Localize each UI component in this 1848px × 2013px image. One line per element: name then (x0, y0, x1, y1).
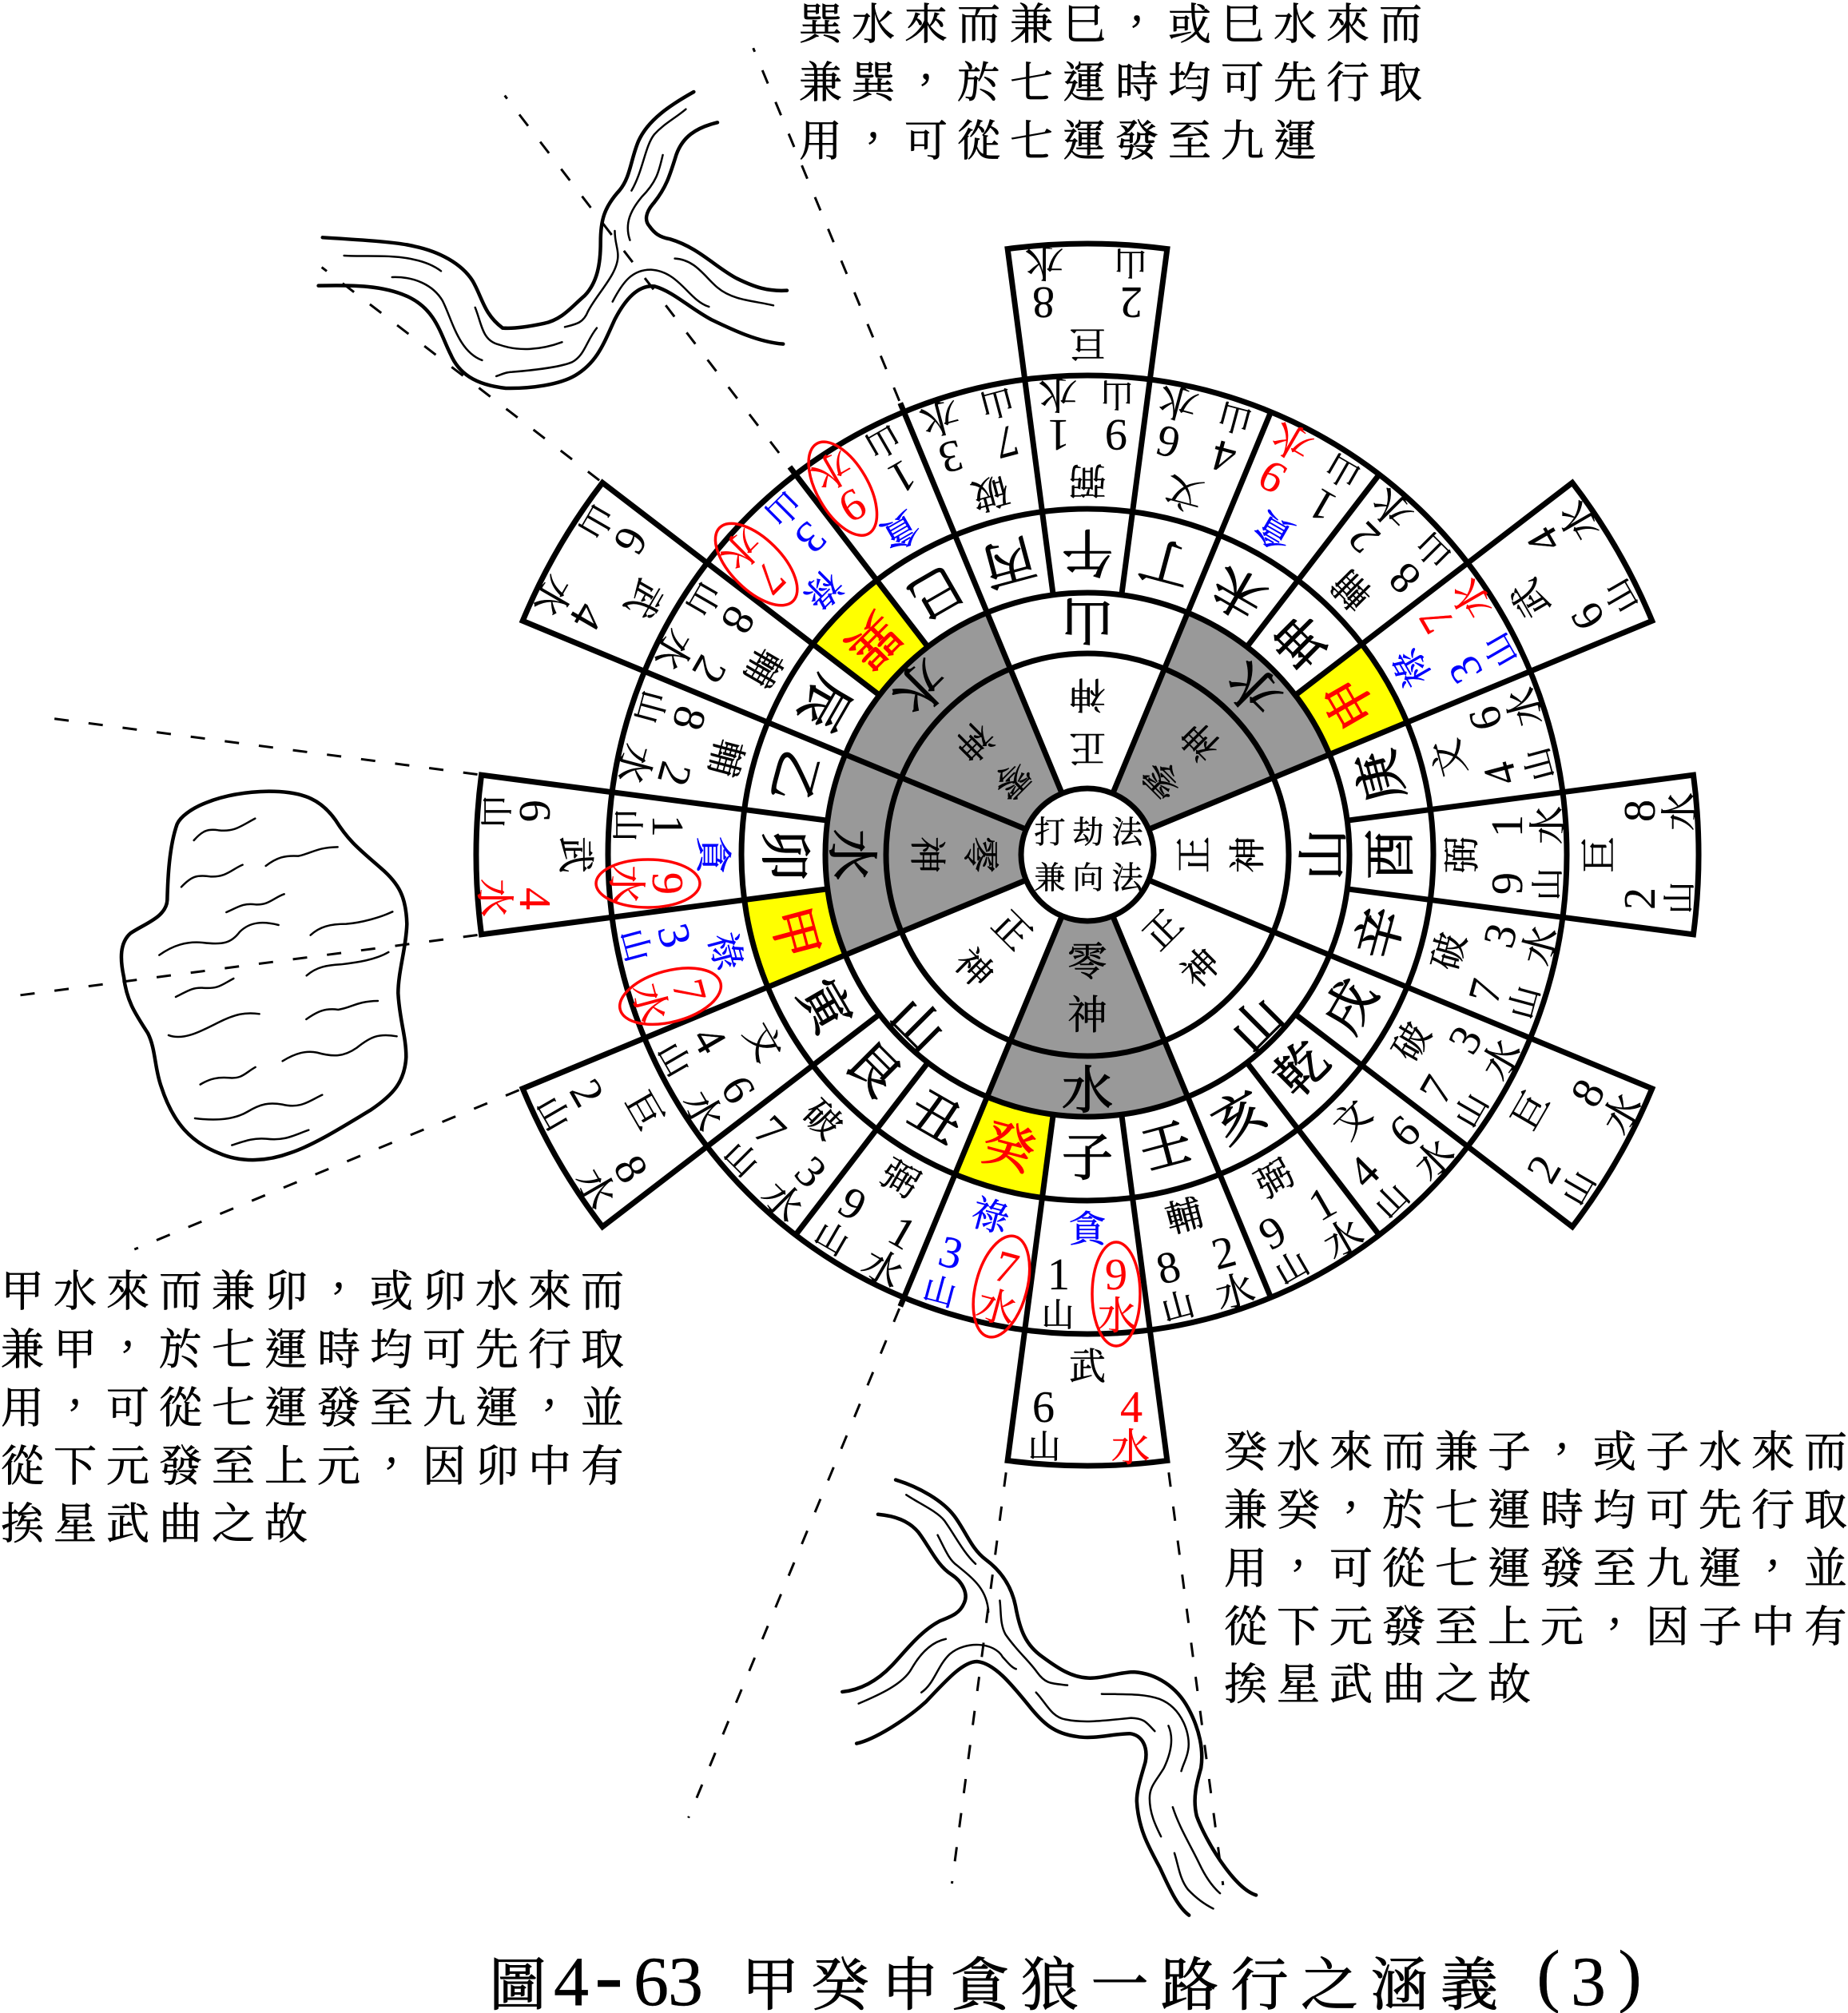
sector: 丁 (1111, 375, 1257, 601)
sector: 子 (1042, 1130, 1140, 1346)
sector: 丑: 丑 (900, 1080, 972, 1155)
sector: 巽: 山 (758, 484, 808, 533)
extended cell: 卯: 武 (554, 836, 596, 873)
sector: 乙 (608, 685, 833, 831)
sector: 戌: 戌 (1313, 971, 1388, 1042)
sector: 癸: 山 (919, 1269, 960, 1313)
sector: 乾: 4 (1339, 1147, 1389, 1197)
sector: 辛: 7 (1459, 974, 1512, 1008)
sector: 丙: 破 (968, 468, 1013, 518)
title (489, 1928, 1642, 2013)
sector: 乙: 乙 (760, 744, 829, 808)
extended cell: 申: 山 (1598, 573, 1646, 620)
sector: 未: 9 (1250, 450, 1294, 503)
extended cell: 卯: 6 (510, 800, 559, 822)
extended cell: 申: 6 (1561, 594, 1616, 638)
extended cell: 申: 武 (1504, 573, 1558, 625)
sector: 辛: 破 (1425, 929, 1474, 975)
title: ) (1618, 1937, 1642, 2013)
sector: 丁: 文 (1162, 468, 1207, 518)
inner sector: southwest 零神 水: 神 (1174, 714, 1228, 768)
sector: 未: 1 (1301, 478, 1345, 532)
sector: 甲 (601, 882, 836, 1034)
text block: right: 用，可從七運發至九運，並 (1224, 1545, 1848, 1593)
text block: top: 巽水來而兼巳，或巳水來而 (799, 1, 1432, 49)
inner sector: north 零神 水 (1062, 939, 1113, 1120)
sector: 亥: 水 (1317, 1212, 1371, 1268)
extended cell: 辰: 武 (617, 573, 670, 625)
sector: 子: 水 (1098, 1296, 1136, 1337)
sector: 壬: 2 (1206, 1226, 1241, 1280)
sector: 卯: 卯 (756, 829, 812, 880)
sector: 乙: 水 (608, 740, 659, 788)
sector: 戌: 3 (1439, 1018, 1492, 1062)
extended cell: 卯 (473, 796, 596, 917)
sector: 卯: 9 (642, 872, 692, 895)
sector: 卯: 山 (609, 808, 646, 842)
text block: left: 挨星武曲之故 (1, 1500, 317, 1548)
sector: 辰: 辰 (787, 667, 862, 739)
sector: 丙: 3 (934, 430, 968, 483)
sector: 申 (1302, 571, 1528, 757)
inner sector: northwest 正神 山: 山 (1220, 987, 1296, 1063)
text block: right: 從下元發至上元，因子中有 (1224, 1603, 1848, 1651)
sector: 寅: 6 (711, 1068, 765, 1112)
sector: 寅: 山 (650, 1036, 698, 1082)
inner sector: east 零神 水 (823, 829, 1000, 880)
extended cell: 寅: 8 (603, 1147, 658, 1191)
sector: 申: 申 (1313, 667, 1388, 739)
centre circle (1021, 788, 1154, 921)
sector: 丑 (806, 1070, 992, 1297)
sector: 午: 午 (1062, 522, 1113, 580)
extended cell: 戌 (1484, 1046, 1651, 1213)
sector: 壬: 壬 (1134, 1114, 1198, 1182)
sector: 戌 (1303, 950, 1530, 1136)
sector: 申: 水 (1445, 571, 1500, 625)
sector: 辰 (645, 574, 872, 760)
sector: 未: 水 (1266, 412, 1320, 468)
river: bottom (842, 1480, 1256, 1916)
text block: left (1, 1268, 634, 1548)
river: upper left (319, 92, 787, 388)
sector: 辛: 3 (1474, 919, 1528, 953)
sector: 坤: 輔 (1325, 562, 1380, 617)
inner sector: west 正神 山 (1174, 829, 1352, 880)
sector: 巽 (701, 474, 925, 698)
sector: 酉: 水 (1528, 806, 1571, 844)
sector: 乙: 輔 (701, 735, 750, 780)
inner sector: southeast 零神 水 (881, 649, 1044, 812)
extended cell: 卯: 水 (473, 879, 515, 917)
text block: left: 從下元發至上元，因卯中有 (1, 1443, 634, 1491)
ring outlines (608, 375, 1567, 1334)
sector: 艮: 水 (753, 1173, 810, 1231)
sector: 坤: 8 (1380, 553, 1430, 603)
compass wheel (473, 240, 1702, 1470)
sector: 亥: 弼 (1249, 1153, 1301, 1206)
sector: 辰: 輔 (736, 641, 789, 693)
sector: 乾: 水 (1406, 1132, 1464, 1189)
sector: 乾: 文 (1325, 1092, 1380, 1147)
sector: 戌: 7 (1410, 1068, 1464, 1112)
sector: 癸: 3 (934, 1226, 968, 1280)
sector: 辛: 山 (1502, 982, 1546, 1023)
sector: 酉: 酉 (1363, 829, 1419, 880)
sector: 午: 水 (1039, 372, 1077, 414)
sector: 卯: 1 (642, 815, 692, 837)
inner sector: southeast 零神 水: 零 (984, 752, 1039, 807)
sector: 寅 (646, 952, 873, 1138)
extended cell: 戌: 8 (1561, 1071, 1616, 1115)
inner sector: southeast 零神 水: 神 (947, 714, 1001, 768)
sector: 庚: 山 (1517, 744, 1561, 784)
sector: 午: 1 (1047, 410, 1070, 459)
sector: 酉 (1363, 806, 1571, 901)
sector: 壬: 山 (1158, 1284, 1198, 1328)
sector: 巽: 3 (785, 512, 836, 562)
text block: left: 用，可從七運發至九運，並 (1, 1384, 634, 1432)
inner sector: east 零神 水: 零 (960, 836, 1000, 873)
sector: 巽: 7 (745, 553, 795, 603)
sector: 卯: 貪 (692, 836, 733, 875)
text block: top: 兼巽，於七運時均可先行取 (799, 59, 1432, 107)
extended cell: 酉: 水 (1660, 792, 1702, 831)
sector: 丙: 7 (989, 415, 1023, 468)
sector: 戌: 破 (1385, 1016, 1439, 1068)
extended cell: 酉: 2 (1616, 887, 1665, 910)
sector: 丙: 水 (916, 391, 964, 442)
sector: 未 (1182, 412, 1369, 639)
sector: 辰: 山 (680, 576, 728, 622)
extended cell: 戌: 水 (1596, 1087, 1651, 1141)
inner sector: north 零神 水: 水 (1062, 1062, 1113, 1120)
sector: 丑: 山 (809, 1214, 855, 1262)
extended cell: 戌: 山 (1555, 1165, 1603, 1212)
sector: 丁: 丁 (1134, 527, 1198, 596)
sector: 壬: 水 (1211, 1268, 1259, 1319)
sector: 庚: 4 (1474, 756, 1528, 791)
sector: 亥: 山 (1269, 1244, 1315, 1292)
inner sector: southeast 零神 水: 水 (881, 649, 957, 725)
text block: left: 甲水來而兼卯，或卯水來而 (1, 1268, 634, 1316)
radial dividers (612, 379, 1563, 1330)
sector: 寅: 寅 (787, 971, 863, 1045)
sector: 丁: 6 (1151, 415, 1186, 468)
inner sector: south 正神 山: 神 (1069, 674, 1106, 714)
inner sector: northeast 正神 山: 正 (984, 903, 1039, 958)
sector: 辛 (1341, 879, 1567, 1024)
sector: 癸: 7 (989, 1241, 1023, 1295)
extended cell: 子: 水 (1111, 1427, 1150, 1470)
sector: 午 (1039, 372, 1133, 580)
extended cell: 午: 2 (1120, 277, 1143, 327)
text block: right (1224, 1428, 1848, 1709)
sector: 艮: 艮 (835, 1031, 911, 1107)
sector: 戌: 水 (1474, 1033, 1530, 1087)
sector: 丑: 9 (830, 1177, 874, 1231)
sector: 午: 9 (1105, 410, 1127, 459)
sector: 辰: 水 (645, 622, 701, 677)
extended cell: 子: 山 (1027, 1428, 1061, 1465)
centre label (1034, 816, 1143, 896)
extended cell: 寅 (525, 1049, 693, 1216)
sector: 艮: 破 (795, 1092, 850, 1147)
sector: 申: 7 (1410, 598, 1464, 641)
extended cell: 卯: 4 (510, 887, 559, 910)
centre label: 兼向法 (1034, 861, 1143, 896)
inner sector: southwest 零神 水: 水 (1217, 649, 1293, 725)
sector: 子: 貪 (1069, 1209, 1108, 1249)
sector: 癸: 癸 (977, 1114, 1041, 1182)
sector: 丁: 水 (1155, 375, 1202, 427)
sector: 未: 未 (1203, 554, 1275, 629)
sector: 丁: 4 (1206, 430, 1241, 483)
sector: 丁: 山 (1214, 396, 1256, 440)
sector: 卯: 水 (604, 865, 647, 903)
sector: 艮: 7 (745, 1106, 795, 1157)
sector: 子: 山 (1042, 1296, 1074, 1333)
inner sector: southwest 零神 水: 零 (1135, 752, 1190, 807)
sector: 甲: 3 (647, 919, 701, 953)
inner sector: south 正神 山: 山 (1062, 591, 1113, 649)
extended cell: 午: 山 (1114, 244, 1147, 281)
sector: 乾 (1250, 1014, 1464, 1229)
extended cell: 戌: 2 (1517, 1147, 1572, 1191)
sector: 艮: 山 (717, 1134, 765, 1184)
sector: 坤: 山 (1409, 526, 1458, 575)
extended cell: 戌: 巨 (1504, 1085, 1558, 1137)
sector: 巳: 9 (830, 478, 874, 532)
sector: 巳: 1 (880, 450, 924, 503)
extended cell: 寅: 山 (529, 1090, 577, 1137)
extended cell: 申: 4 (1517, 518, 1572, 562)
gray water wedges (825, 598, 1344, 1117)
sector: 癸: 水 (972, 1283, 1020, 1334)
inner sector: northeast 正神 山 (879, 898, 1044, 1063)
inner sector: east 零神 水: 神 (906, 836, 948, 873)
extended cell: 辰: 山 (572, 498, 620, 545)
sector: 寅: 文 (736, 1016, 789, 1068)
extended cell: 子: 6 (1032, 1383, 1055, 1432)
sector: 丙: 丙 (977, 527, 1041, 596)
inner sector: northeast 正神 山: 山 (879, 987, 955, 1063)
extended cell: 寅: 2 (559, 1071, 614, 1115)
extended cell: 辰: 4 (559, 594, 614, 638)
sector: 巳 (795, 407, 990, 644)
sector: 乙: 山 (629, 686, 673, 728)
inner sector: northeast 正神 山: 神 (947, 941, 1001, 995)
extended cell: 寅: 巨 (617, 1085, 670, 1137)
sector: 酉: 山 (1529, 868, 1566, 901)
sector: 申: 山 (1476, 627, 1524, 673)
sector: 巳: 山 (860, 418, 906, 466)
extended cell: 寅: 水 (567, 1161, 622, 1216)
sector: 坤: 坤 (1264, 602, 1340, 678)
extended cell: 酉 (1579, 792, 1702, 914)
sector: 庚 (1341, 683, 1566, 828)
sector: 庚: 庚 (1346, 744, 1415, 808)
text block: right: 兼癸，於七運時均可先行取 (1224, 1487, 1848, 1535)
yellow highlighted cells (741, 578, 1409, 1201)
extended cell: 酉: 8 (1616, 800, 1665, 822)
inner sector: east 零神 水: 水 (823, 829, 879, 880)
sector: 癸: 祿 (968, 1192, 1013, 1241)
sector: 丑: 水 (855, 1241, 909, 1297)
text block: right: 癸水來而兼子，或子水來而 (1224, 1428, 1848, 1476)
sector: 壬: 8 (1151, 1241, 1186, 1295)
sector: 甲: 山 (614, 925, 658, 966)
extended cell: 酉: 巨 (1579, 836, 1620, 873)
sector: 庚: 文 (1425, 735, 1474, 780)
sector: 酉: 弼 (1441, 836, 1483, 873)
sector: 丑: 1 (880, 1206, 924, 1260)
sector: 甲: 7 (662, 974, 716, 1008)
inner sector: northwest 正神 山: 神 (1174, 941, 1228, 995)
sector: 申: 祿 (1385, 641, 1439, 693)
sector: 辛: 水 (1516, 922, 1567, 970)
extended cell: 子: 4 (1120, 1383, 1143, 1432)
sector: 坤: 水 (1365, 478, 1421, 536)
sector: 巽: 水 (711, 521, 769, 578)
extended cell: 辰: 6 (603, 518, 658, 562)
sector: 乙: 8 (662, 701, 716, 736)
title: ( (1536, 1937, 1560, 2013)
inner sector: northwest 正神 山 (1131, 898, 1296, 1063)
sector: 巳: 巳 (900, 554, 972, 629)
sector: 艮: 3 (785, 1147, 836, 1197)
sector: 庚: 6 (1459, 701, 1512, 736)
inner sector: west 正神 山: 神 (1227, 836, 1269, 873)
extended cell: 午: 8 (1032, 277, 1055, 327)
sector: 辰: 2 (682, 648, 736, 692)
sector: 未: 山 (1320, 447, 1366, 495)
sector: 寅: 4 (682, 1018, 736, 1062)
sector: 子: 1 (1047, 1250, 1070, 1300)
sector: 丙 (916, 376, 1060, 602)
sector: 丙: 山 (976, 381, 1017, 425)
extended cell: 午: 水 (1025, 240, 1063, 283)
lake (121, 792, 407, 1160)
sector: 甲: 祿 (701, 929, 750, 975)
inner sector: north 零神 水: 神 (1067, 993, 1107, 1038)
extended cell: 卯: 山 (477, 796, 514, 828)
sector: 庚: 水 (1500, 683, 1552, 731)
inner sector: west 正神 山: 正 (1174, 836, 1214, 873)
text block: left: 兼甲，於七運時均可先行取 (1, 1326, 634, 1374)
sector: 戌: 山 (1447, 1087, 1495, 1134)
sector: 坤: 2 (1339, 512, 1389, 562)
inner sector: west 正神 山: 山 (1296, 829, 1352, 880)
sector: 卯 (596, 808, 812, 907)
sector: 甲: 水 (623, 979, 674, 1026)
extended cell: 申: 水 (1552, 494, 1608, 548)
extended cell: 午 (1025, 240, 1147, 363)
sector: 未: 貪 (1246, 502, 1301, 557)
sector: 子: 9 (1105, 1250, 1127, 1300)
sector: 午: 山 (1101, 376, 1133, 413)
inner sector: southwest 零神 水 (1131, 649, 1293, 812)
extended cell: 申 (1482, 494, 1650, 661)
extended cell: 午: 巨 (1069, 323, 1106, 363)
text block: top (799, 1, 1432, 165)
sector: 乾: 山 (1367, 1177, 1417, 1225)
centre label: 打劫法 (1034, 816, 1143, 850)
inner sector: north 零神 水: 零 (1067, 939, 1107, 984)
extended cell: 辰: 水 (524, 568, 579, 622)
inner sector: northwest 正神 山: 正 (1135, 903, 1190, 958)
sector: 亥: 亥 (1203, 1080, 1275, 1155)
sector: 巳: 貪 (872, 503, 926, 558)
sector: 乾: 乾 (1264, 1031, 1340, 1107)
sector: 壬 (1115, 1108, 1259, 1333)
sector: 壬: 輔 (1162, 1192, 1207, 1241)
extended outer cells (476, 244, 1699, 1466)
sector: 巽: 祿 (795, 562, 850, 617)
sector: 辛: 辛 (1346, 901, 1415, 965)
sector: 亥: 9 (1250, 1206, 1294, 1260)
sector: 坤 (1247, 478, 1461, 693)
text block: right: 挨星武曲之故 (1224, 1661, 1540, 1709)
sector: 酉: 1 (1483, 815, 1532, 837)
dashed sight lines (19, 48, 1223, 1885)
sector: 巳: 水 (804, 442, 858, 498)
sector: 寅: 水 (674, 1084, 730, 1138)
inner sector: south 正神 山 (1062, 591, 1113, 768)
sector: 癸 (916, 1109, 1069, 1344)
sector: 亥: 1 (1301, 1177, 1345, 1231)
extended cell: 子 (1027, 1347, 1150, 1470)
sector: 午: 弼 (1069, 460, 1106, 500)
text block: top: 用，可從七運發至九運 (799, 117, 1326, 165)
inner sector: south 正神 山: 正 (1069, 727, 1106, 768)
sector: 艮 (713, 1017, 928, 1231)
extended cell: 酉: 山 (1661, 882, 1698, 914)
sector: 亥 (1185, 1069, 1371, 1296)
sector: 酉: 9 (1483, 872, 1532, 895)
sector: 巽: 巽 (833, 602, 911, 679)
sector: 辰: 8 (711, 598, 765, 641)
sector: 乙: 2 (647, 756, 701, 791)
sector: 乾: 6 (1380, 1106, 1430, 1157)
sector: 申: 3 (1439, 648, 1492, 692)
sector: 甲: 甲 (760, 901, 829, 965)
extended cell: 子: 武 (1069, 1347, 1106, 1387)
sector: 子: 子 (1062, 1130, 1113, 1187)
sector: 丑: 弼 (874, 1153, 926, 1206)
extended cell: 辰 (524, 496, 691, 663)
